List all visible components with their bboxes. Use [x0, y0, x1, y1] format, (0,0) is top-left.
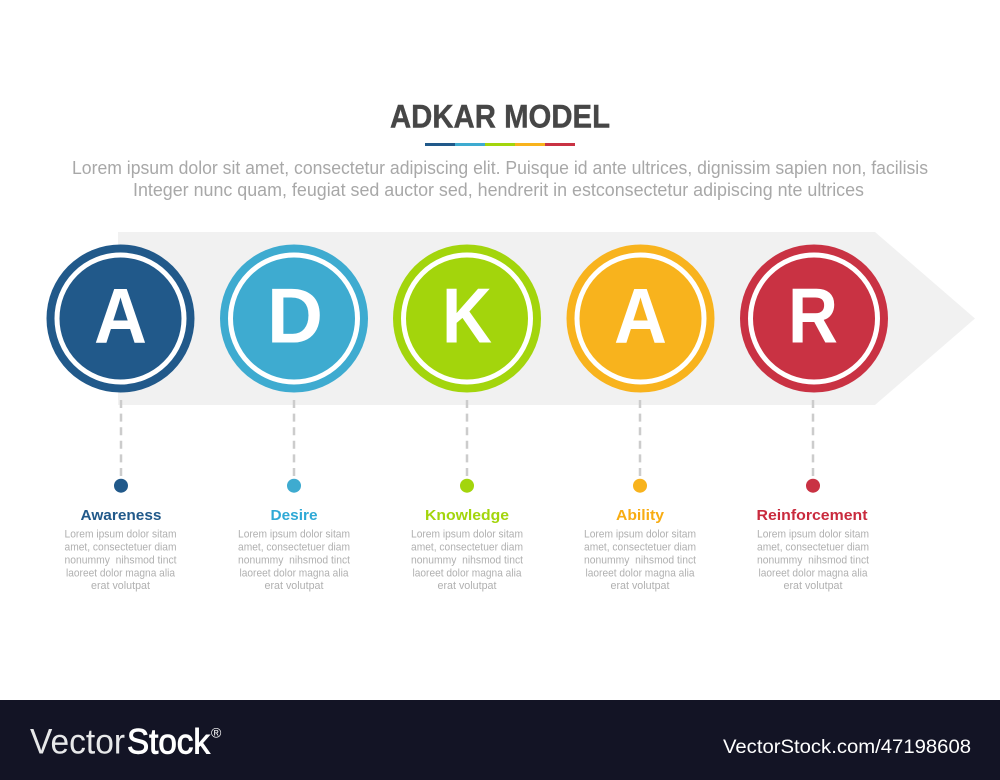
description: Awareness: erat volutpat [91, 580, 150, 592]
description: Awareness: laoreet dolor magna alia [66, 568, 176, 580]
connector: K [466, 400, 468, 476]
subtitle text [72, 158, 928, 200]
title underline: five colour bar [425, 143, 575, 146]
description: Awareness [64, 528, 176, 592]
description: Ability: nonummy nihsmod tinct [584, 554, 696, 566]
dot: K [460, 479, 474, 493]
circle: K: K [442, 272, 492, 360]
description: Awareness: Lorem ipsum dolor sitam [64, 528, 176, 540]
step R: Reinforcement [740, 244, 888, 592]
connector: D [293, 400, 295, 476]
description: Awareness: nonummy nihsmod tinct [64, 554, 176, 566]
circle: A: A [94, 272, 147, 360]
description: Knowledge [411, 528, 523, 592]
footer logo [30, 722, 210, 762]
description: Desire [238, 528, 350, 592]
description: Reinforcement: nonummy nihsmod tinct [757, 554, 869, 566]
description: Knowledge: amet, consectetuer diam [411, 542, 523, 554]
description: Desire: amet, consectetuer diam [238, 542, 350, 554]
label: Knowledge: Knowledge [425, 507, 509, 524]
dot: A [633, 479, 647, 493]
description: Reinforcement [757, 528, 869, 592]
circle: R: R [788, 272, 838, 360]
circle: A: A [614, 272, 667, 360]
dot: R [806, 479, 820, 493]
title: ADKAR MODEL [390, 98, 610, 134]
step A: Awareness [46, 244, 194, 592]
description: Ability: laoreet dolor magna alia [586, 568, 695, 580]
footer bar [0, 700, 1000, 780]
step A: Ability [566, 244, 714, 592]
description: Desire: laoreet dolor magna alia [240, 568, 349, 580]
label: Reinforcement: Reinforcement [756, 507, 868, 524]
step K: Knowledge [393, 244, 541, 592]
circle: D: D [267, 272, 323, 360]
background arrow [118, 232, 975, 405]
description: Knowledge: laoreet dolor magna alia [412, 568, 522, 580]
footer url: VectorStock.com/47198608 [723, 737, 971, 758]
description: Knowledge: nonummy nihsmod tinct [411, 554, 523, 566]
connector: R [812, 400, 814, 476]
description: Reinforcement: erat volutpat [784, 580, 842, 592]
subtitle text: Integer nunc quam, feugiat sed auctor sed, hendrerit in estconsectetur adipiscing nte ultrices [133, 180, 864, 200]
description: Ability: Lorem ipsum dolor sitam [584, 528, 696, 540]
dot: A [114, 479, 128, 493]
footer logo: Stock [127, 722, 210, 762]
description: Knowledge: erat volutpat [438, 580, 496, 592]
description: Ability: erat volutpat [610, 580, 670, 592]
circle: D [220, 244, 368, 392]
description: Ability: amet, consectetuer diam [584, 542, 696, 554]
description: Ability [584, 528, 696, 592]
label: Awareness: Awareness [80, 507, 162, 524]
connector: A [639, 400, 641, 476]
circle: R [740, 244, 888, 392]
description: Desire: Lorem ipsum dolor sitam [238, 528, 350, 540]
subtitle text: Lorem ipsum dolor sit amet, consectetur adipiscing elit. Puisque id ante ultrices, dignissim sapien non, facilisis [72, 158, 928, 178]
description: Desire: erat volutpat [264, 580, 324, 592]
label: Ability: Ability [616, 507, 665, 524]
footer logo: Vector [30, 722, 125, 762]
description: Desire: nonummy nihsmod tinct [238, 554, 350, 566]
connector: A [120, 400, 122, 476]
description: Awareness: amet, consectetuer diam [64, 542, 176, 554]
circle: K [393, 244, 541, 392]
description: Reinforcement: Lorem ipsum dolor sitam [757, 528, 869, 540]
description: Knowledge: Lorem ipsum dolor sitam [411, 528, 523, 540]
label: Desire: Desire [270, 507, 318, 524]
circle: A [566, 244, 714, 392]
dot: D [287, 479, 301, 493]
circle: A [46, 244, 194, 392]
step D: Desire [220, 244, 368, 592]
description: Reinforcement: laoreet dolor magna alia [758, 568, 868, 580]
description: Reinforcement: amet, consectetuer diam [757, 542, 869, 554]
registered mark: ® [211, 724, 222, 740]
